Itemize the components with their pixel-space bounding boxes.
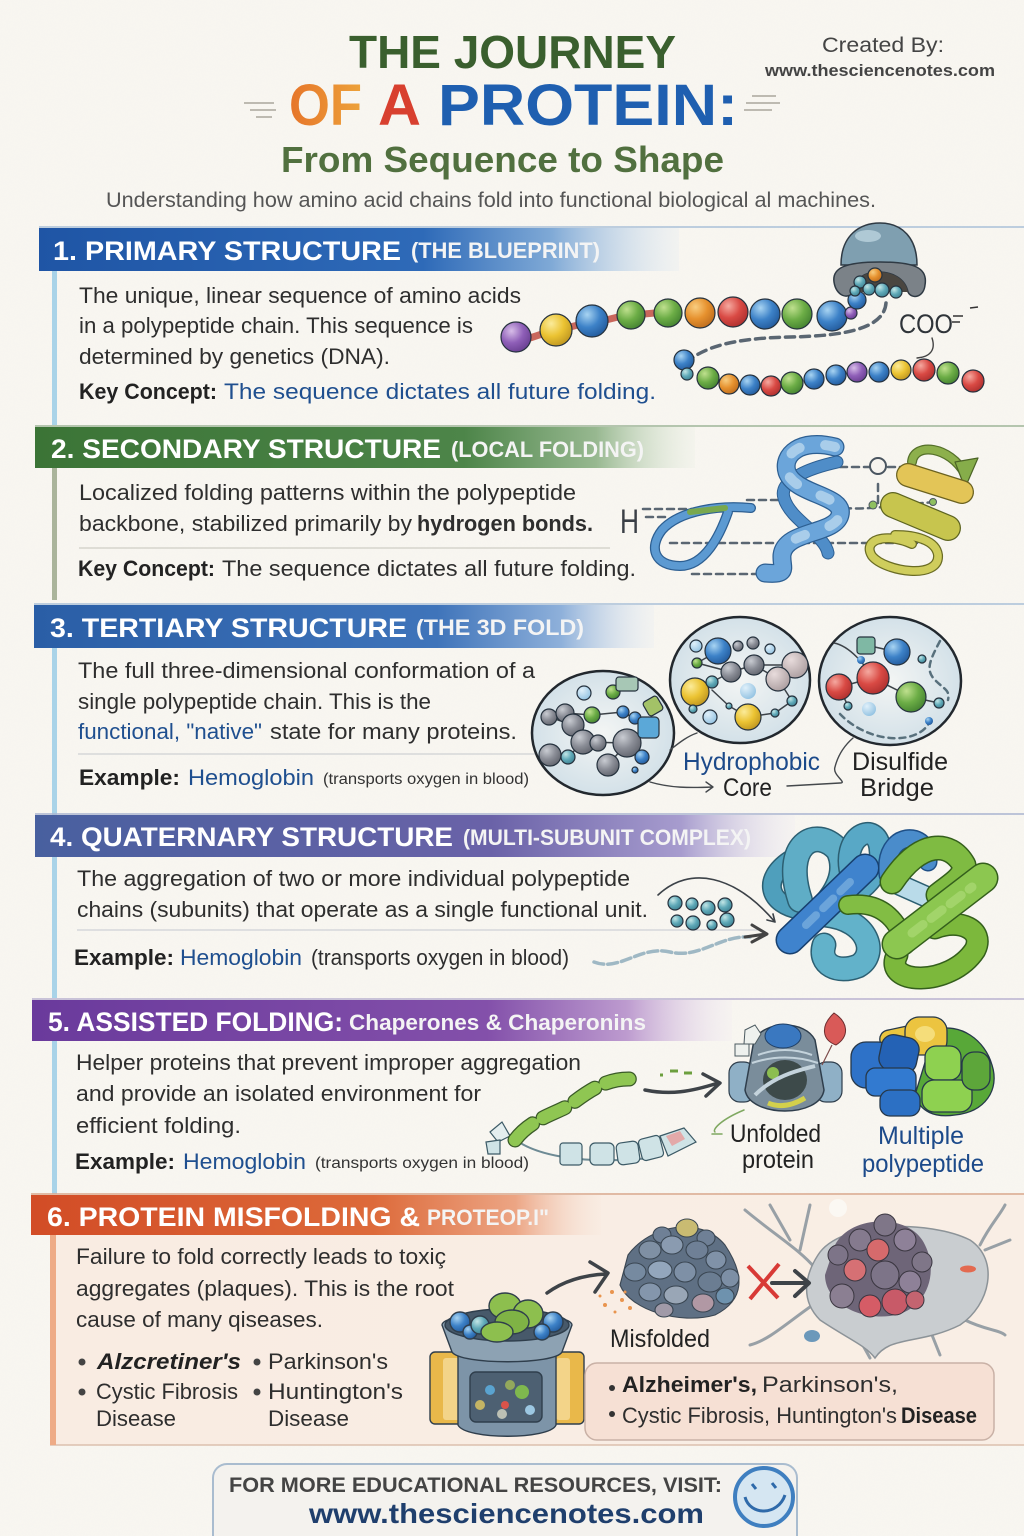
labels: unfolded protein, multiple polypeptide: Multiple: [878, 1122, 964, 1150]
description 5: and provide an isolated environment for: [76, 1081, 481, 1106]
illustration: alpha helix and beta ribbons: [620, 445, 978, 574]
key concept 2: Key Concept:: [78, 556, 215, 581]
circle: right: [819, 617, 961, 745]
description 1: in a polypeptide chain. This sequence is: [79, 313, 473, 338]
description 2: [79, 480, 593, 536]
creator credit: Created By:: [822, 34, 944, 57]
header band 4: 4. QUATERNARY STRUCTURE: [50, 822, 453, 852]
title line 2: A: [378, 73, 421, 138]
illustration: misfolded aggregate: [620, 1219, 739, 1318]
illustration: hemoglobin-like knot: [772, 833, 983, 978]
header band 6: [31, 1195, 601, 1235]
description 6: [76, 1244, 454, 1332]
footer url: www.thesciencenotes.com: [308, 1498, 704, 1529]
circle: middle: [670, 617, 810, 743]
header band 4: (MULTI-SUBUNIT COMPLEX): [463, 825, 751, 850]
example 3: [79, 765, 529, 790]
title line 2: PROTEIN:: [438, 73, 738, 138]
creator credit: [764, 34, 995, 80]
footer: [213, 1464, 797, 1536]
callout: disease box: [585, 1363, 994, 1440]
panel: secondary structure: [35, 426, 1024, 600]
example 4: [74, 945, 569, 970]
example 4: Hemoglobin: [180, 945, 302, 970]
label: COO-: [899, 307, 978, 358]
header band 3: [34, 605, 654, 648]
description 1: The unique, linear sequence of amino acids: [79, 283, 521, 308]
disease list: Alzcretiner's: [96, 1349, 241, 1374]
description 4: chains (subunits) that operate as a single functional unit.: [77, 897, 648, 922]
title line 2: [289, 73, 738, 138]
description 2: hydrogen bonds.: [417, 511, 593, 536]
header band 5: 5. ASSISTED FOLDING:: [48, 1007, 343, 1037]
illustration: alpha helix and beta ribbons: H: [620, 503, 639, 541]
disease list: [78, 1349, 403, 1431]
header band 6: PROTEOP.I": [427, 1205, 549, 1230]
description 5: efficient folding.: [76, 1113, 241, 1138]
description 1: determined by genetics (DNA).: [79, 344, 390, 369]
ribosome: [834, 223, 925, 298]
labels: unfolded protein, multiple polypeptide: protein: [742, 1146, 814, 1174]
labels: unfolded protein, multiple polypeptide: polypeptide: [862, 1150, 984, 1178]
illustration: multiple polypeptide cluster: [851, 1017, 994, 1116]
icon: blocked arrow: [748, 1264, 809, 1299]
description 6: Failure to fold correctly leads to toxiç: [76, 1244, 446, 1269]
header band 2: (LOCAL FOLDING): [451, 437, 644, 462]
header band 2: 2. SECONDARY STRUCTURE: [51, 434, 441, 464]
title line 1: THE JOURNEY: [349, 26, 676, 78]
footer call to action: FOR MORE EDUCATIONAL RESOURCES, VISIT:: [229, 1474, 722, 1497]
labels: hydrophobic core, disulfide bridge: Bridge: [860, 774, 934, 802]
key concept 2: The sequence dictates all future folding.: [222, 556, 636, 581]
illustration: proteasome bucket: [430, 1293, 584, 1436]
example 4: Example:: [74, 945, 174, 970]
header band 1: 1. PRIMARY STRUCTURE: [53, 236, 401, 266]
header band 3: (THE 3D FOLD): [416, 615, 584, 640]
description 5: Helper proteins that prevent improper aggregation: [76, 1050, 581, 1075]
description 6: aggregates (plaques). This is the root: [76, 1276, 454, 1301]
description 3: single polypeptide chain. This is the: [78, 689, 431, 714]
example 3: Hemoglobin: [188, 765, 314, 790]
description 1: [79, 283, 521, 369]
panel: protein misfolding: [31, 1194, 1024, 1445]
description 3: The full three-dimensional conformation of a: [78, 658, 536, 683]
panel: tertiary structure: [34, 604, 1024, 815]
callout: disease box: Parkinson's,: [762, 1372, 898, 1397]
key concept 1: [79, 379, 656, 404]
circle: left: [532, 671, 674, 795]
illustration: subunits and arrows: [594, 878, 775, 964]
example 3: Example:: [79, 765, 180, 790]
header band 1: (THE BLUEPRINT): [411, 238, 600, 263]
callout: disease box: Cystic Fibrosis, Huntington's: [622, 1403, 897, 1428]
panel: assisted folding: [32, 999, 1024, 1194]
example 5: (transports oxygen in blood): [315, 1155, 529, 1172]
labels: unfolded protein, multiple polypeptide: Unfolded: [730, 1120, 821, 1148]
example 3: (transports oxygen in blood): [323, 771, 529, 788]
panel: quaternary structure: [35, 814, 1024, 998]
disease list: Parkinson's: [268, 1349, 388, 1374]
key concept 2: [78, 556, 636, 581]
header band 3: 3. TERTIARY STRUCTURE: [50, 613, 407, 643]
labels: hydrophobic core, disulfide bridge: [650, 733, 948, 802]
disease list: Disease: [96, 1406, 176, 1431]
ribbon: yellow-green coil: [870, 450, 978, 571]
example 5: [75, 1149, 529, 1174]
example 5: Hemoglobin: [183, 1149, 306, 1174]
callout: disease box: Disease: [901, 1403, 977, 1428]
key concept 1: The sequence dictates all future folding.: [224, 379, 656, 404]
key concept 1: Key Concept:: [79, 379, 217, 404]
title line 2: OF: [289, 73, 362, 138]
description 4: The aggregation of two or more individual polypeptide: [77, 866, 630, 891]
description 6: cause of many qiseases.: [76, 1307, 323, 1332]
example 4: (transports oxygen in blood): [311, 945, 569, 970]
description 2: Localized folding patterns within the polypeptide: [79, 480, 576, 505]
panel: primary structure: [39, 223, 1024, 425]
icon: smiley: [735, 1468, 793, 1526]
description 4: [77, 866, 648, 922]
label: misfolded: Misfolded: [610, 1325, 710, 1353]
ribbon: alpha helix: [765, 445, 840, 573]
callout: disease box: Alzheimer's,: [622, 1372, 757, 1397]
header band 5: [32, 1000, 732, 1041]
labels: unfolded protein, multiple polypeptide: [730, 1120, 984, 1178]
header band 4: [35, 815, 795, 857]
description 5: [76, 1050, 581, 1138]
header band 2: [35, 427, 695, 468]
illustration: neuron with plaque: [745, 1199, 1010, 1358]
illustration: ribosome and amino acid chain: [501, 223, 984, 396]
header band 6: 6. PROTEIN MISFOLDING &: [47, 1202, 420, 1232]
header band 5: Chaperones & Chaperonins: [349, 1010, 646, 1035]
subtitle: From Sequence to Shape: [281, 139, 724, 180]
example 5: Example:: [75, 1149, 175, 1174]
labels: hydrophobic core, disulfide bridge: Core: [723, 774, 772, 802]
labels: hydrophobic core, disulfide bridge: Hydrophobic: [683, 748, 820, 776]
creator credit: www.thesciencenotes.com: [764, 61, 995, 80]
title block: [106, 26, 876, 212]
header band 1: [39, 228, 679, 271]
disease list: Disease: [268, 1406, 349, 1431]
tagline: Understanding how amino acid chains fold into functional biological al machines.: [106, 189, 876, 212]
disease list: Huntington's: [268, 1379, 403, 1404]
illustration: chaperonin barrel: [712, 1013, 846, 1134]
orange debris: [598, 1290, 632, 1314]
description 2: backbone, stabilized primarily by: [79, 511, 412, 536]
arrow: to misfolded aggregate: [547, 1262, 608, 1293]
label: COO-: COO: [899, 309, 953, 339]
ribbon: beta turn: [655, 507, 751, 566]
description 3: state for many proteins.: [270, 719, 517, 744]
illustration: hydrophobic core magnifier circles: [532, 617, 961, 802]
illustration: unfolded chain being folded: [486, 1071, 720, 1165]
labels: hydrophobic core, disulfide bridge: Disulfide: [852, 748, 948, 776]
description 3: [78, 658, 536, 744]
description 3: functional, "native": [78, 719, 262, 744]
disease list: Cystic Fibrosis: [96, 1379, 238, 1404]
